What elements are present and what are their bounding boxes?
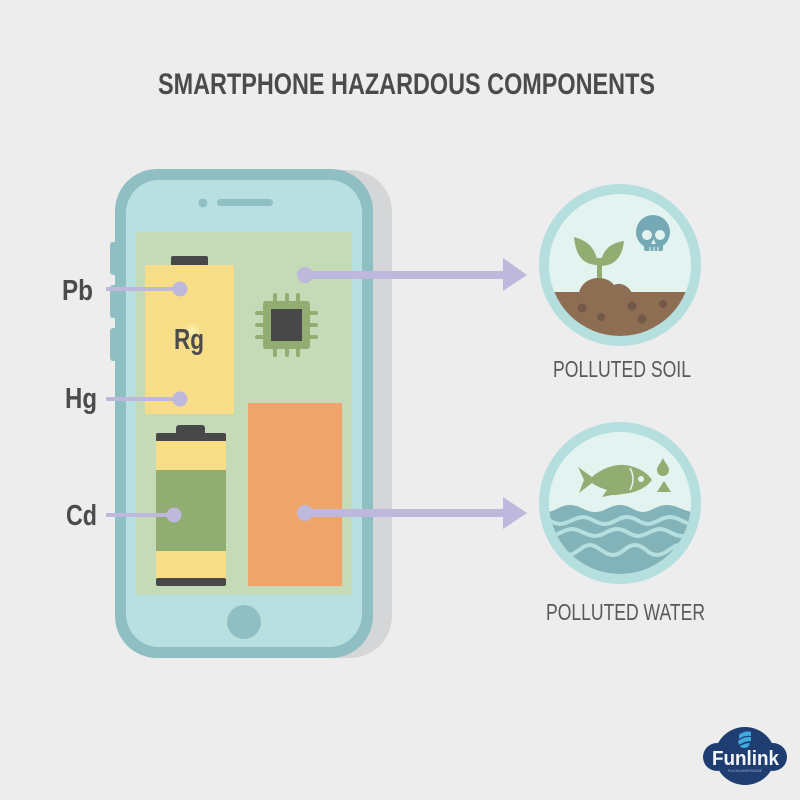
waves	[550, 505, 690, 574]
icon: polluted water	[539, 427, 700, 580]
soil	[554, 278, 686, 336]
label Hg with leader: Hg	[65, 383, 97, 415]
arrow: chip to polluted soil	[297, 258, 527, 291]
title: SMARTPHONE HAZARDOUS COMPONENTS	[158, 68, 655, 101]
skull	[636, 215, 670, 251]
label Pb with leader: Pb	[62, 275, 93, 307]
label Rg: Rg	[174, 324, 204, 356]
orange component	[248, 403, 342, 586]
chip icon	[257, 295, 316, 355]
logo wordmark: Funlink	[712, 748, 780, 770]
logo: Funlink	[703, 727, 787, 785]
phone screen	[126, 180, 362, 647]
cylindrical battery	[156, 425, 226, 586]
large yellow battery	[145, 256, 234, 414]
logo tagline: PLA DA UNIVERSIDADE	[728, 768, 762, 773]
label Pb with leader	[62, 275, 188, 307]
fish	[578, 465, 652, 497]
droplet and triangle	[657, 458, 671, 492]
circuit board	[136, 232, 352, 595]
phone shadow	[140, 170, 392, 658]
arrow: orange component to polluted water	[297, 497, 527, 529]
icon: polluted soil	[540, 189, 700, 342]
home button	[227, 605, 261, 639]
logo globe	[738, 731, 751, 748]
side buttons	[110, 242, 120, 361]
label Cd with leader	[66, 500, 182, 532]
camera and speaker	[198, 198, 273, 208]
phone illustration	[110, 169, 392, 658]
caption: polluted water: POLLUTED WATER	[546, 599, 705, 625]
caption: polluted soil: POLLUTED SOIL	[553, 356, 691, 382]
label Hg with leader	[65, 383, 188, 415]
phone body	[115, 169, 373, 658]
sprout	[574, 237, 624, 284]
label Cd with leader: Cd	[66, 500, 97, 532]
